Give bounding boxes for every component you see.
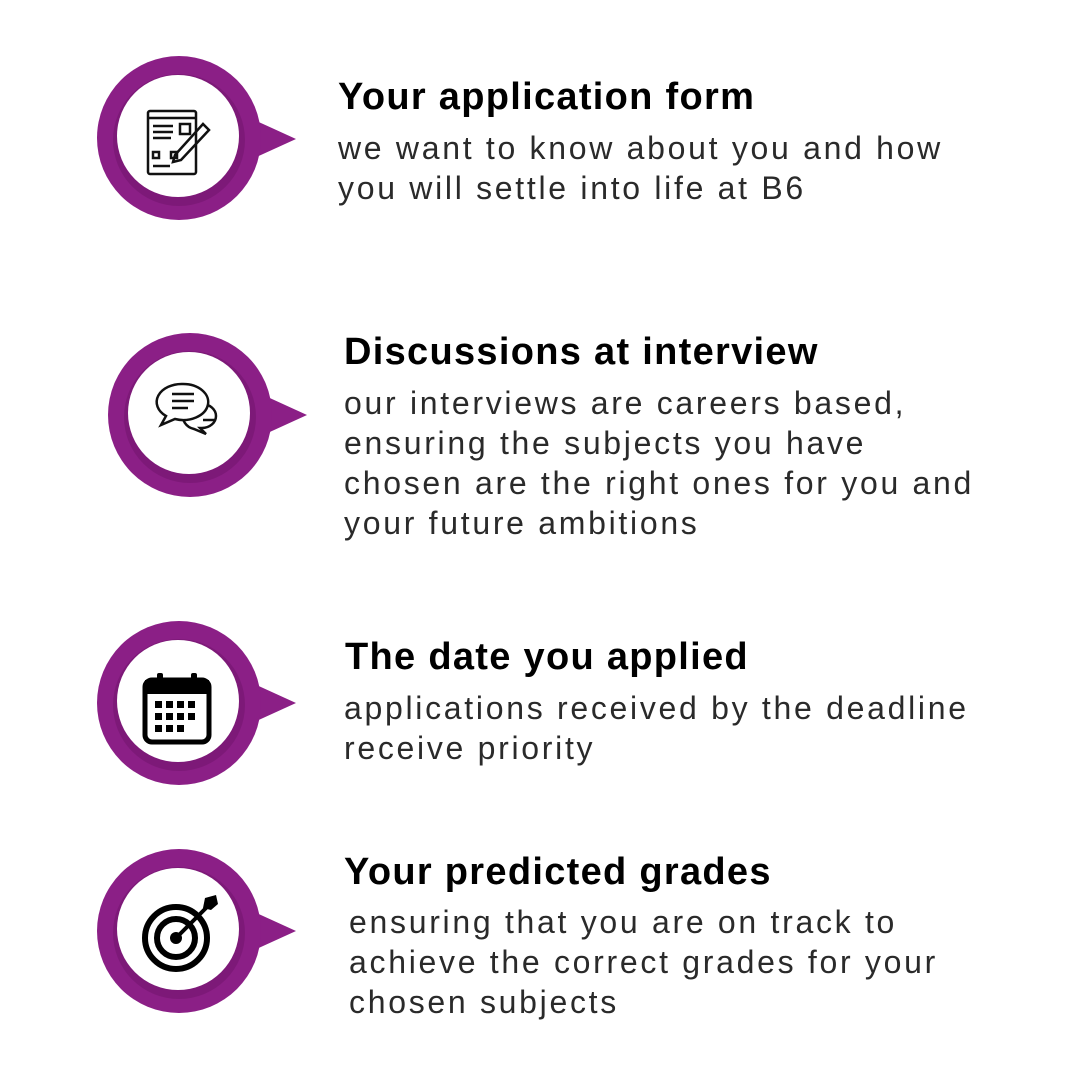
text 2 [344,385,974,541]
title 4: Your predicted grades [344,851,772,893]
icon: target [145,895,218,969]
text 1: you will settle into life at B6 [338,170,806,206]
title 3: The date you applied [345,636,749,678]
text 3: applications received by the deadline [344,690,969,726]
text 4 [349,904,938,1020]
icon: speech bubbles [157,384,216,434]
text 4: achieve the correct grades for your [349,944,938,980]
text 1: we want to know about you and how [338,130,943,166]
title 2: Discussions at interview [344,331,819,373]
text 3 [344,690,969,766]
text 1 [338,130,943,206]
bubble 1: application form [97,56,296,220]
text 4: chosen subjects [349,984,619,1020]
icon: form with pencil [148,111,209,174]
bubble 3: calendar [97,621,296,785]
bubble 4: target [97,849,296,1013]
text 2: our interviews are careers based, [344,385,906,421]
bubble 2: discussions [108,333,307,497]
text 2: chosen are the right ones for you and [344,465,974,501]
text 2: your future ambitions [344,505,700,541]
title 1: Your application form [338,76,755,118]
icon: calendar [145,673,209,742]
text 4: ensuring that you are on track to [349,904,897,940]
text 2: ensuring the subjects you have [344,425,866,461]
text 3: receive priority [344,730,595,766]
